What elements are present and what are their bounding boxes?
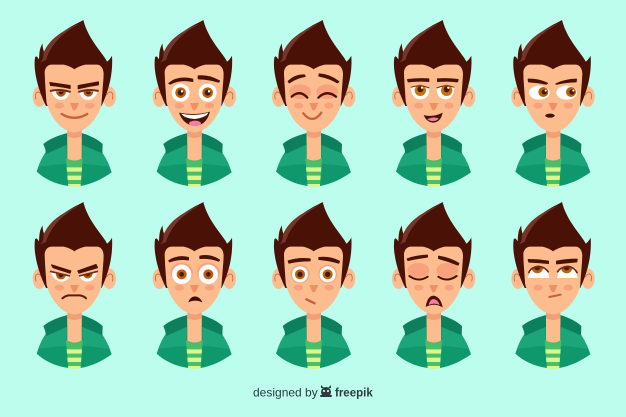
- character: angry: [33, 202, 116, 369]
- character: laughing with closed eyes: [272, 20, 355, 187]
- character: sleepy yawning: [392, 202, 475, 369]
- icon: freepik mascot: [320, 385, 332, 397]
- character: looking sideways: [511, 20, 595, 187]
- top row, first two characters: [33, 20, 236, 187]
- top row, last three characters: [272, 20, 595, 187]
- character: excited: [153, 20, 236, 187]
- text: designed by: designed by: [253, 386, 318, 400]
- character: smirking: [33, 20, 116, 187]
- character: skeptical looking up: [511, 202, 595, 369]
- character: cheerful looking up: [392, 20, 475, 187]
- character: shocked: [153, 202, 236, 369]
- character: doubtful: [272, 202, 355, 369]
- bottom row, first two characters: [33, 202, 236, 369]
- footer credit: [253, 385, 373, 400]
- bottom row, last three characters: [272, 202, 595, 369]
- text: freepik: freepik: [335, 388, 373, 400]
